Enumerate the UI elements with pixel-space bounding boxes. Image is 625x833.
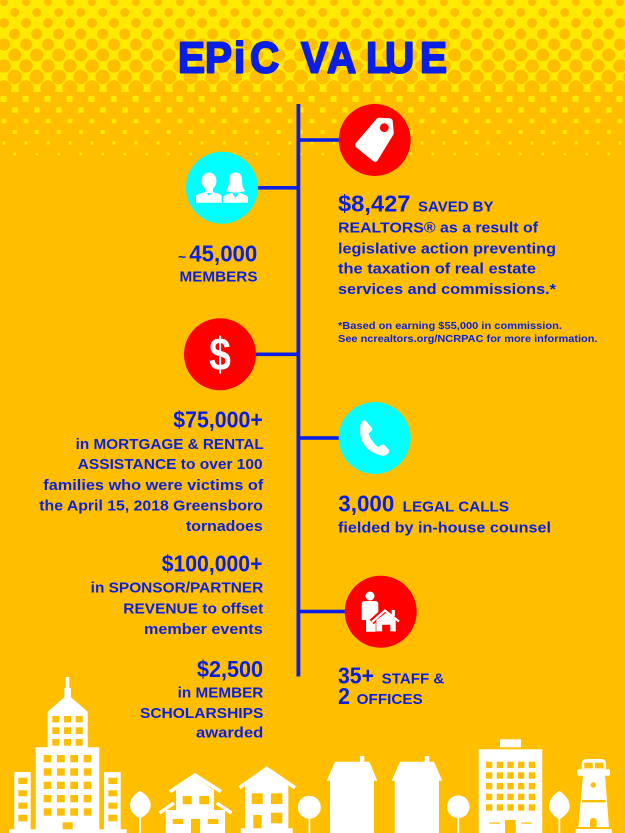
text: mortgage assistance xyxy=(39,406,264,535)
text: sponsor revenue: in SPONSOR/PARTNER xyxy=(91,580,263,597)
icon: price tag xyxy=(339,104,411,176)
text: scholarships xyxy=(140,656,263,742)
text: footnote xyxy=(338,320,598,345)
icon: phone xyxy=(339,402,411,474)
text: legal calls: fielded by in-house counsel xyxy=(338,520,551,537)
text: legal calls: 3,000 xyxy=(338,491,394,517)
text: savings: $8,427 xyxy=(338,191,410,217)
lighthouse xyxy=(576,759,612,833)
text: scholarships: in MEMBER xyxy=(178,684,263,701)
text: savings: the taxation of real estate xyxy=(338,260,536,278)
townhouse A xyxy=(327,756,377,833)
text: mortgage assistance: tornadoes xyxy=(186,518,263,535)
text: footnote: See ncrealtors.org/NCRPAC for more information. xyxy=(338,333,598,345)
text: mortgage assistance: ASSISTANCE to over 100 xyxy=(78,456,263,473)
text: members: ~ xyxy=(178,249,186,265)
tree 4 xyxy=(549,791,570,833)
townhouse B xyxy=(392,756,442,833)
timeline spine and connectors xyxy=(256,104,346,676)
icon: members xyxy=(186,152,258,224)
text: sponsor revenue xyxy=(91,551,263,638)
text: staff and offices: STAFF & xyxy=(382,670,444,687)
text: sponsor revenue: $100,000+ xyxy=(162,551,262,577)
text: savings: legislative action preventing xyxy=(338,240,556,257)
text: sponsor revenue: member events xyxy=(144,621,263,638)
house 2 xyxy=(240,768,295,833)
text: scholarships: awarded xyxy=(196,725,263,742)
text: savings xyxy=(338,191,556,298)
tree 1 xyxy=(130,791,151,833)
title: EPiC VALUE xyxy=(178,33,447,82)
icon: dollar sign: $ xyxy=(209,329,231,381)
text: legal calls: LEGAL CALLS xyxy=(403,499,509,516)
text: legal calls xyxy=(338,491,551,537)
text: members: 45,000 xyxy=(189,241,257,267)
skyline xyxy=(9,677,612,833)
text: staff and offices: OFFICES xyxy=(357,691,423,708)
text: staff and offices xyxy=(338,662,444,709)
text: members xyxy=(178,241,258,286)
text: footnote: *Based on earning $55,000 in commission. xyxy=(338,320,562,332)
text: staff and offices: 2 xyxy=(338,683,350,709)
text: scholarships: SCHOLARSHIPS xyxy=(140,705,263,722)
tree 2 xyxy=(298,796,321,833)
text: members: MEMBERS xyxy=(180,269,258,286)
house 1 xyxy=(160,775,232,833)
text: savings: services and commissions.* xyxy=(338,281,556,298)
text: mortgage assistance: in MORTGAGE & RENTAL xyxy=(76,436,264,453)
text: mortgage assistance: families who were victims of xyxy=(43,477,264,494)
tall tower building xyxy=(9,677,127,833)
text: sponsor revenue: REVENUE to offset xyxy=(123,600,263,617)
text: savings: SAVED BY xyxy=(418,199,494,216)
text: savings: REALTORS® as a result of xyxy=(338,220,539,237)
tree 3 xyxy=(447,795,470,833)
text: mortgage assistance: $75,000+ xyxy=(173,406,263,432)
text: staff and offices: 35+ xyxy=(338,662,374,688)
text: mortgage assistance: the April 15, 2018 Greensboro xyxy=(39,498,263,514)
text: scholarships: $2,500 xyxy=(197,656,263,682)
icon: staff and house xyxy=(345,576,417,648)
office building xyxy=(479,739,542,833)
icon: dollar sign xyxy=(184,318,256,390)
